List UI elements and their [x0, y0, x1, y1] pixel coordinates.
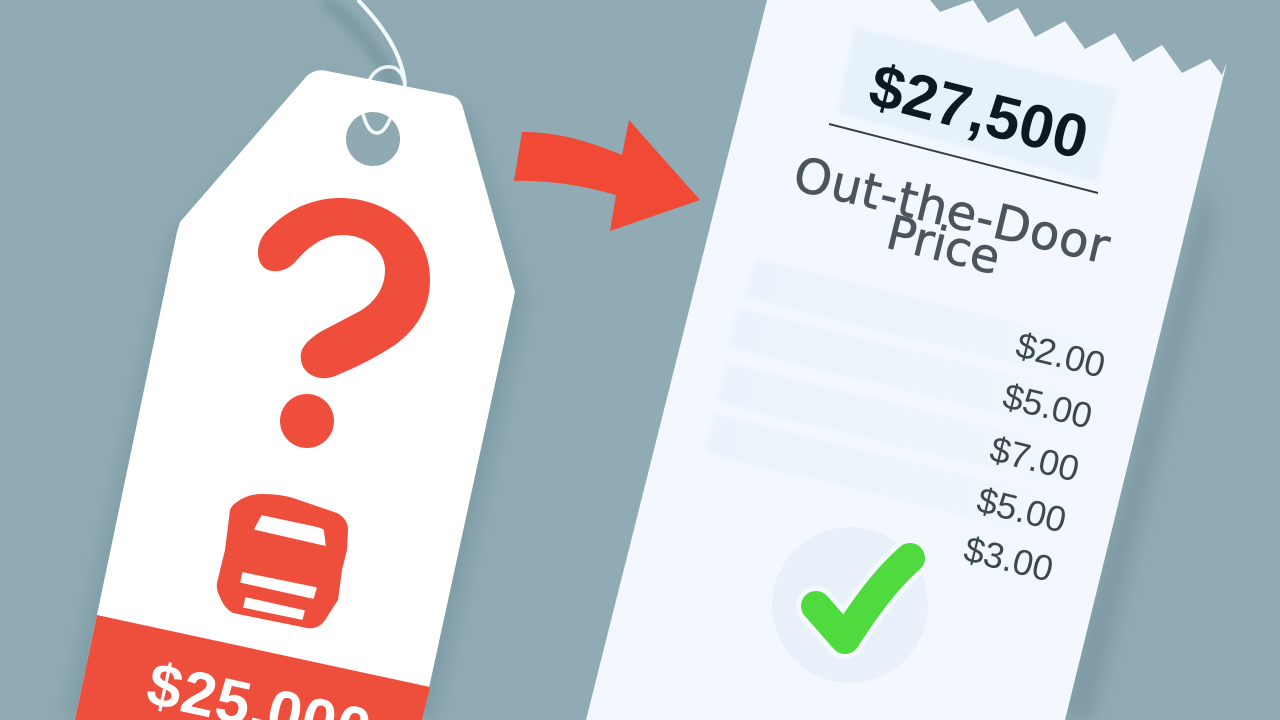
label: out-the-door price: Price [881, 205, 1006, 286]
total divider [829, 124, 1098, 193]
total highlight box [837, 27, 1118, 182]
line item bars [705, 258, 1110, 540]
icon: truck front [217, 494, 348, 628]
tag body [75, 70, 515, 720]
shadow of price tag [62, 78, 528, 720]
line item prices: $2.00 [1012, 324, 1109, 386]
tag hole [346, 112, 400, 166]
icon: check mark badge [772, 527, 928, 683]
receipt paper [586, 0, 1227, 720]
receipt [586, 0, 1227, 720]
price tag string back loop [358, 0, 405, 88]
total amount: $27,500 [863, 51, 1095, 172]
price band [75, 615, 430, 720]
shadow of string [325, 0, 395, 90]
price tag [75, 70, 515, 720]
line item prices: $5.00 [973, 479, 1070, 541]
string through hole [363, 114, 391, 133]
line item prices: $7.00 [986, 428, 1083, 490]
line item prices: $3.00 [960, 528, 1057, 590]
line item prices [960, 324, 1109, 590]
icon: question mark [258, 198, 430, 448]
line item prices: $5.00 [999, 375, 1096, 437]
label: out-the-door price: Out-the-Door [788, 146, 1115, 276]
arrow [514, 120, 700, 231]
shadow of receipt [1060, 180, 1216, 720]
